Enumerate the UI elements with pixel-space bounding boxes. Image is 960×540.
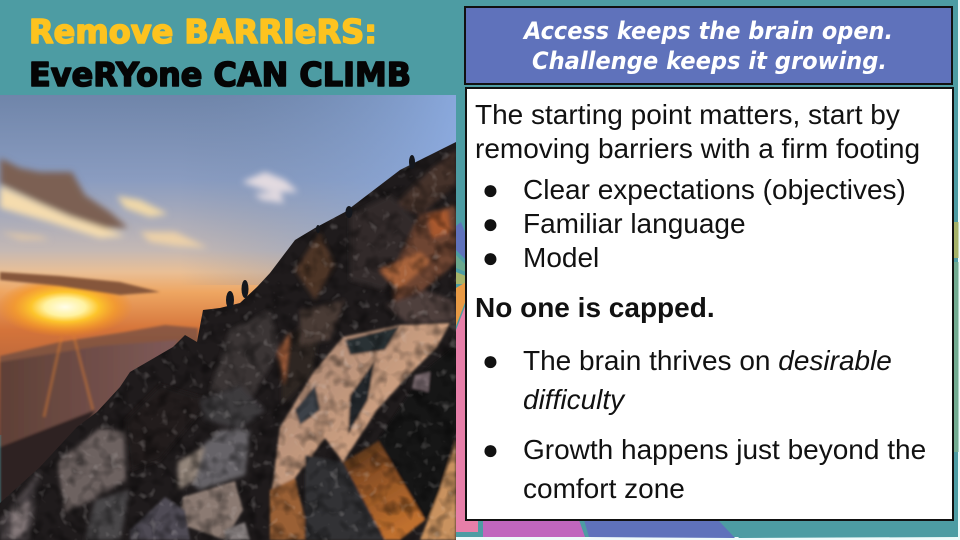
distant mountains	[0, 325, 200, 510]
upper rock faces	[210, 150, 456, 405]
intro text	[475, 99, 920, 164]
bullet list: removing barriers: ●	[482, 174, 499, 205]
dark ridge silhouette	[0, 142, 456, 540]
bullet list: removing barriers: Clear expectations (objectives)	[523, 174, 906, 205]
bullet list: removing barriers	[482, 174, 906, 273]
bullet list: removing barriers: ●	[482, 242, 499, 273]
title line 1: Remove BARRIeRS:	[29, 12, 377, 51]
quote banner	[465, 7, 952, 84]
bullet list: growth: ●	[482, 434, 499, 465]
title	[29, 12, 411, 94]
bullet list: removing barriers: Model	[523, 242, 599, 273]
foreground boulder	[130, 481, 250, 540]
quote line 2: Challenge keeps it growing.	[532, 47, 887, 75]
bullet list: growth	[482, 345, 926, 504]
sun glow	[1, 283, 130, 334]
bullet list: growth: The brain thrives on desirable	[523, 345, 892, 376]
bullet list: growth: Growth happens just beyond the	[523, 434, 926, 465]
sunlit boulder	[270, 323, 456, 540]
lower-left rock faces	[0, 385, 265, 540]
intro text: removing barriers with a firm footing	[475, 133, 920, 164]
clouds	[0, 158, 298, 248]
bullet list: removing barriers: Familiar language	[523, 208, 746, 239]
title line 2: EveRYone CAN CLIMB	[29, 55, 411, 94]
climbers	[226, 155, 415, 309]
bullet list: growth: ●	[482, 345, 499, 376]
intro text: The starting point matters, start by	[475, 99, 900, 130]
main text panel	[466, 88, 953, 520]
rock texture	[0, 140, 456, 540]
bullet list: removing barriers: ●	[482, 208, 499, 239]
sky	[0, 95, 456, 435]
sun rays	[44, 333, 93, 417]
bold statement: No one is capped.	[475, 292, 715, 323]
bullet list: growth: comfort zone	[523, 473, 685, 504]
low sunset cloud	[0, 272, 160, 295]
bullet list: growth: difficulty	[523, 384, 626, 415]
decorative colour bands	[456, 222, 958, 538]
rock surfaces	[0, 140, 456, 540]
photo: climbers on a rocky ridge at sunset	[0, 95, 456, 540]
quote line 1: Access keeps the brain open.	[522, 17, 893, 45]
